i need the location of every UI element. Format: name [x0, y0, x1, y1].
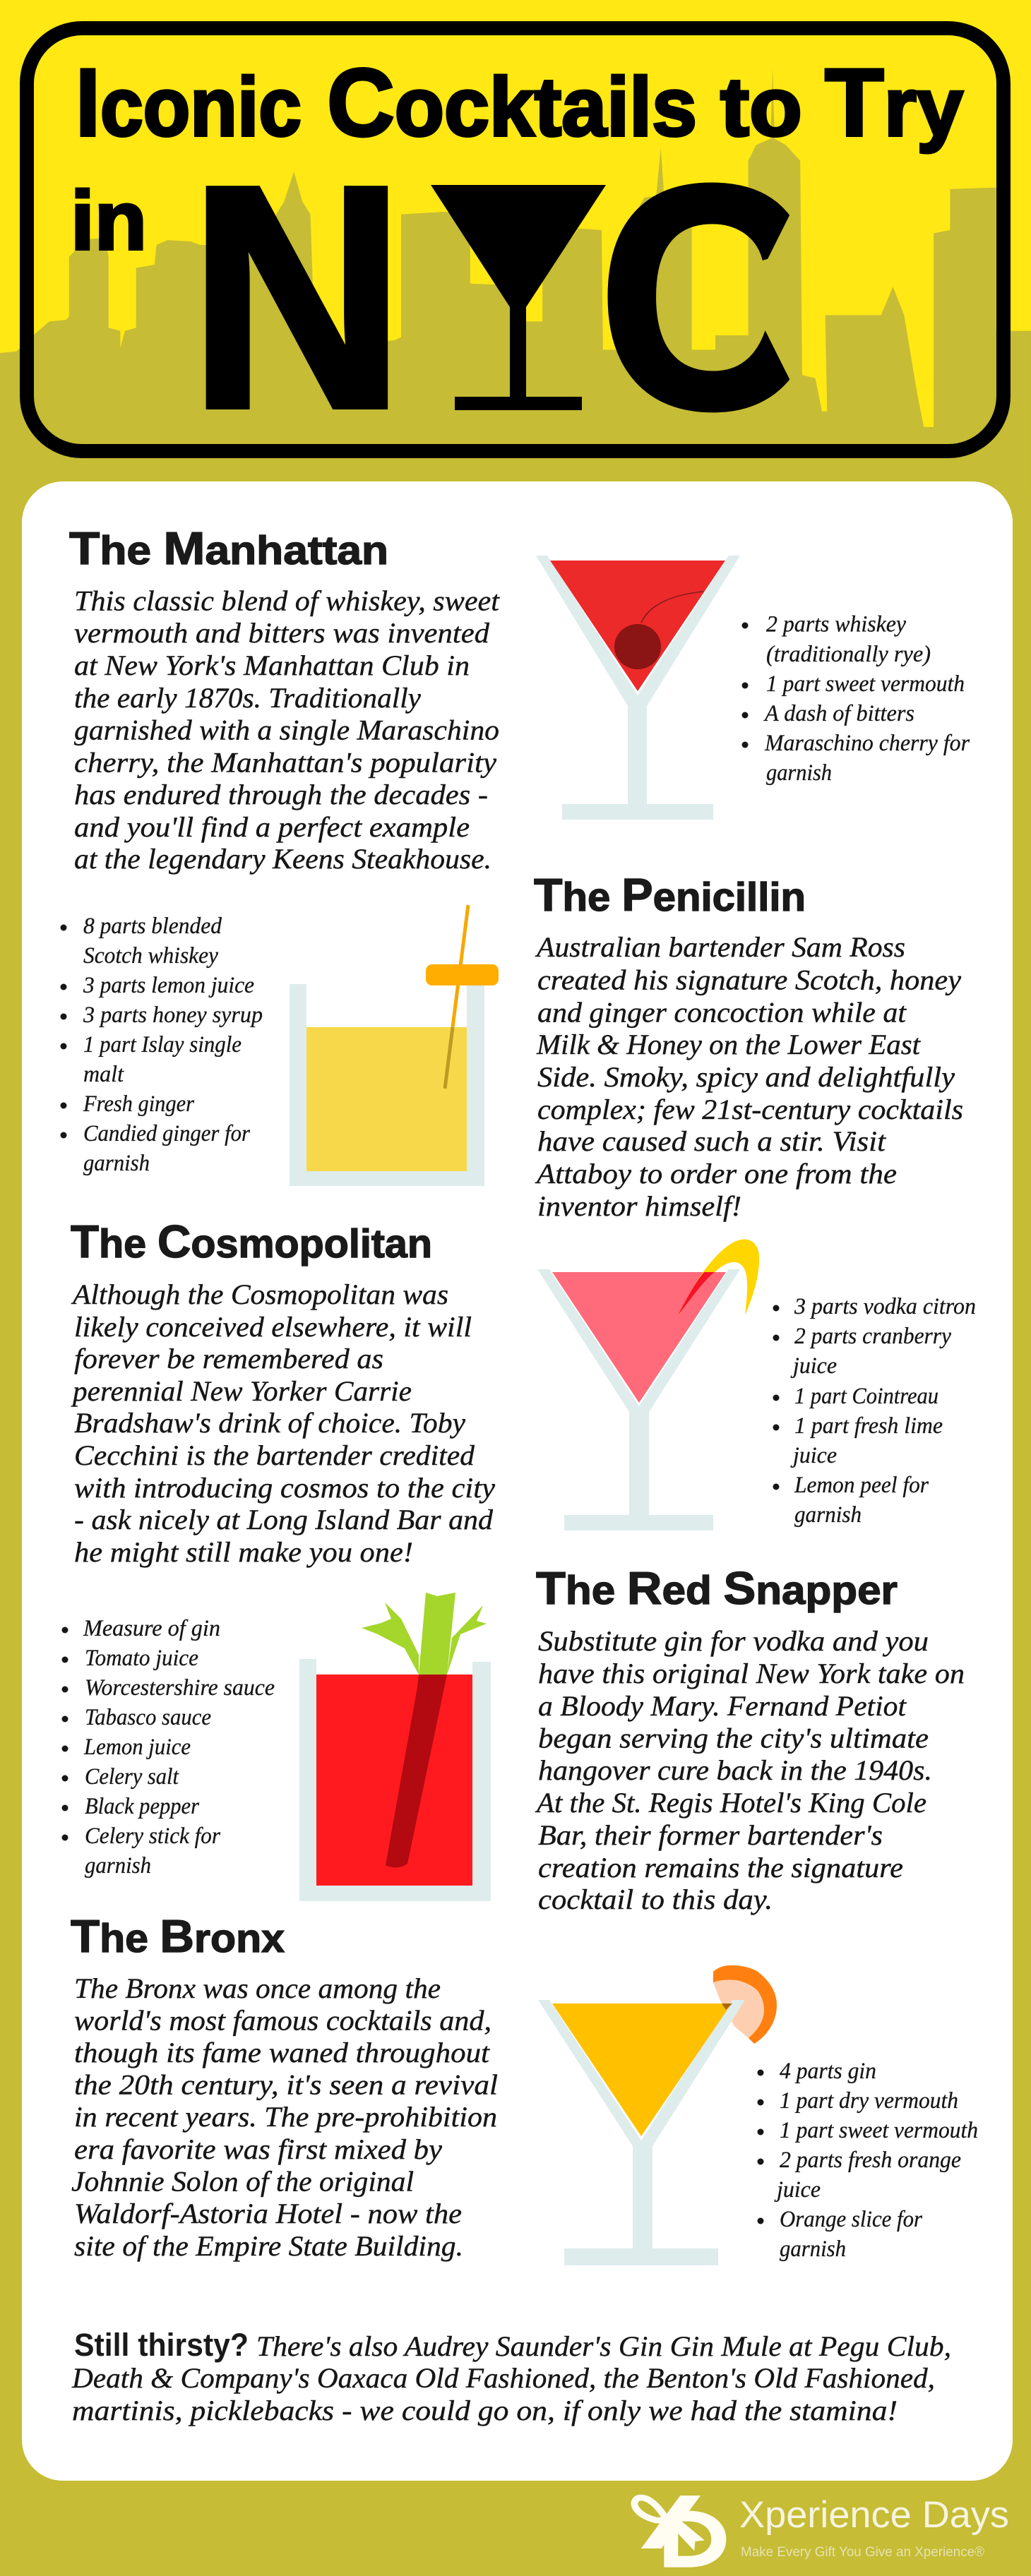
- ingredient list: Scotch whiskey: [83, 943, 218, 969]
- icon: XD ribbon mark: [634, 2496, 726, 2568]
- description: Cecchini is the bartender credited: [74, 1439, 475, 1471]
- ingredient list: Fresh ginger: [83, 1091, 194, 1117]
- ingredient list: [61, 913, 263, 1176]
- description: have this original New York take on: [538, 1658, 965, 1689]
- ingredient list: garnish: [794, 1502, 862, 1528]
- description: [535, 1625, 965, 1915]
- ingredient list: 1 part sweet vermouth: [766, 671, 965, 697]
- description: he might still make you one!: [74, 1536, 413, 1568]
- description: though its fame waned throughout: [74, 2037, 490, 2068]
- icon: rocks glass with ginger: [290, 905, 499, 1186]
- section: The Bronx: [71, 1910, 978, 2265]
- icon: tall glass with celery: [299, 1593, 491, 1901]
- ingredient list: Candied ginger for: [83, 1121, 250, 1146]
- description: [71, 1972, 498, 2262]
- description: Substitute gin for vodka and you: [538, 1625, 929, 1657]
- ingredient list: Measure of gin: [83, 1616, 220, 1641]
- description: Although the Cosmopolitan was: [71, 1278, 448, 1310]
- ingredient list: garnish: [780, 2236, 846, 2262]
- description: and you'll find a perfect example: [74, 811, 470, 843]
- title word: in: in: [71, 174, 147, 268]
- ingredient list: Black pepper: [85, 1794, 199, 1819]
- description: Johnnie Solon of the original: [71, 2166, 414, 2197]
- description: Waldorf-Astoria Hotel - now the: [74, 2198, 462, 2229]
- title letter C: C: [598, 121, 813, 474]
- description: began serving the city's ultimate: [538, 1723, 929, 1754]
- brand name: Xperience Days: [739, 2494, 1009, 2536]
- ingredient list: garnish: [766, 760, 832, 786]
- logo: Xperience Days: [634, 2494, 1009, 2568]
- ingredient list: 1 part Cointreau: [794, 1384, 938, 1409]
- ingredient list: A dash of bitters: [763, 701, 914, 726]
- closing note: Still thirsty: Still thirsty?: [74, 2327, 249, 2363]
- description: The Bronx was once among the: [74, 1972, 441, 2004]
- ingredient list: [757, 2059, 978, 2262]
- description: Australian bartender Sam Ross: [535, 931, 905, 963]
- white content panel: [22, 481, 1013, 2481]
- ingredient list: Lemon juice: [83, 1735, 191, 1760]
- header rounded border: [27, 28, 1003, 451]
- heading: The Cosmopolitan: [71, 1216, 432, 1267]
- description: Side. Smoky, spicy and delightfully: [537, 1061, 955, 1093]
- closing note: Still thirsty: Death & Company's Oaxaca Old Fashioned, the Benton's Old Fashioned,: [71, 2362, 935, 2394]
- description: and ginger concoction while at: [537, 997, 907, 1028]
- ingredient list: juice: [774, 2177, 821, 2203]
- description: created his signature Scotch, honey: [537, 964, 961, 995]
- title line 1: Cocktails: [327, 49, 697, 156]
- icon: martini with cherry: [536, 556, 740, 820]
- description: perennial New Yorker Carrie: [71, 1375, 412, 1407]
- ingredient list: juice: [790, 1353, 837, 1379]
- description: era favorite was first mixed by: [74, 2133, 442, 2165]
- ingredient list: malt: [83, 1062, 124, 1087]
- ingredient list: 4 parts gin: [780, 2059, 876, 2084]
- section: The Red Snapper: [62, 1562, 965, 1915]
- ingredient list: [62, 1616, 275, 1879]
- ingredient list: [773, 1294, 976, 1528]
- description: hangover cure back in the 1940s.: [538, 1754, 932, 1786]
- closing note: Still thirsty: There's also Audrey Saunder's Gin Gin Mule at Pegu Club,: [256, 2330, 951, 2362]
- description: forever be remembered as: [74, 1343, 383, 1374]
- heading: The Bronx: [71, 1910, 285, 1962]
- ingredient list: juice: [790, 1443, 837, 1468]
- title line 1: to: [720, 61, 802, 154]
- ingredient list: garnish: [85, 1853, 151, 1879]
- tagline: Make Every Gift You Give an Xperience®: [741, 2545, 984, 2560]
- title line 1: Iconic: [76, 49, 302, 156]
- description: site of the Empire State Building.: [74, 2230, 463, 2262]
- description: [74, 585, 500, 875]
- description: Attaboy to order one from the: [535, 1158, 897, 1190]
- description: creation remains the signature: [538, 1852, 903, 1883]
- title line 1: Try: [825, 49, 963, 156]
- description: the early 1870s. Traditionally: [74, 682, 421, 714]
- icon: martini with orange slice: [538, 1965, 777, 2265]
- description: the 20th century, it's seen a revival: [74, 2068, 498, 2101]
- description: [71, 1278, 495, 1568]
- description: in recent years. The pre-prohibition: [74, 2101, 497, 2133]
- ingredient list: Tomato juice: [85, 1646, 198, 1671]
- header banner: [0, 0, 1031, 494]
- title line 1: [76, 49, 963, 156]
- ingredient list: Celery stick for: [85, 1823, 220, 1849]
- description: with introducing cosmos to the city: [74, 1472, 495, 1504]
- ingredient list: Celery salt: [85, 1764, 179, 1790]
- closing note: Still thirsty: [71, 2327, 951, 2426]
- heading: The Penicillin: [534, 869, 806, 921]
- ingredient list: [741, 611, 970, 786]
- description: - ask nicely at Long Island Bar and: [74, 1504, 494, 1535]
- icon: cosmopolitan martini with lemon peel: [537, 1240, 759, 1530]
- title letter N: N: [189, 121, 405, 474]
- description: At the St. Regis Hotel's King Cole: [535, 1787, 926, 1819]
- description: garnished with a single Maraschino: [74, 714, 499, 745]
- ingredient list: 3 parts vodka citron: [794, 1294, 976, 1319]
- description: cherry, the Manhattan's popularity: [74, 747, 496, 778]
- description: world's most famous cocktails and,: [74, 2005, 491, 2036]
- ingredient list: 1 part dry vermouth: [780, 2088, 958, 2114]
- ingredient list: 1 part sweet vermouth: [780, 2118, 978, 2143]
- NYC skyline silhouette: [0, 68, 1031, 494]
- ingredient list: 8 parts blended: [83, 913, 222, 939]
- ingredient list: 2 parts cranberry: [794, 1324, 951, 1349]
- description: a Bloody Mary. Fernand Petiot: [538, 1690, 907, 1722]
- ingredient list: 3 parts honey syrup: [83, 1002, 263, 1028]
- heading: The Manhattan: [69, 522, 388, 574]
- ingredient list: 2 parts fresh orange: [780, 2147, 961, 2173]
- ingredient list: 1 part fresh lime: [794, 1413, 943, 1439]
- description: at New York's Manhattan Club in: [74, 649, 470, 681]
- ingredient list: 2 parts whiskey: [766, 611, 906, 637]
- section: The Penicillin: [61, 869, 963, 1222]
- description: This classic blend of whiskey, sweet: [74, 585, 500, 617]
- closing note: Still thirsty: martinis, picklebacks - we could go on, if only we had the stamina!: [72, 2395, 898, 2426]
- description: have caused such a stir. Visit: [537, 1125, 886, 1157]
- icon: martini glass as letter Y: [431, 185, 606, 410]
- description: [535, 931, 963, 1222]
- heading: The Red Snapper: [536, 1562, 898, 1614]
- ingredient list: garnish: [83, 1151, 150, 1176]
- description: cocktail to this day.: [538, 1883, 773, 1915]
- description: has endured through the decades -: [74, 779, 488, 810]
- description: Bar, their former bartender's: [538, 1819, 883, 1851]
- description: Milk & Honey on the Lower East: [536, 1029, 921, 1060]
- ingredient list: 3 parts lemon juice: [83, 973, 254, 998]
- description: complex; few 21st-century cocktails: [537, 1094, 963, 1125]
- ingredient list: Tabasco sauce: [85, 1705, 211, 1730]
- section: The Manhattan: [69, 522, 970, 875]
- ingredient list: Orange slice for: [780, 2207, 922, 2232]
- ingredient list: Worcestershire sauce: [85, 1675, 275, 1701]
- ingredient list: Lemon peel for: [794, 1473, 929, 1498]
- header yellow sky: [0, 0, 1031, 494]
- ingredient list: (traditionally rye): [766, 642, 931, 667]
- description: Bradshaw's drink of choice. Toby: [74, 1407, 465, 1439]
- description: vermouth and bitters was invented: [74, 617, 490, 649]
- description: inventor himself!: [537, 1190, 741, 1222]
- description: at the legendary Keens Steakhouse.: [74, 843, 491, 875]
- ingredient list: Maraschino cherry for: [764, 731, 970, 756]
- ingredient list: 1 part Islay single: [83, 1032, 242, 1058]
- description: likely conceived elsewhere, it will: [74, 1311, 472, 1343]
- section: The Cosmopolitan: [71, 1216, 976, 1568]
